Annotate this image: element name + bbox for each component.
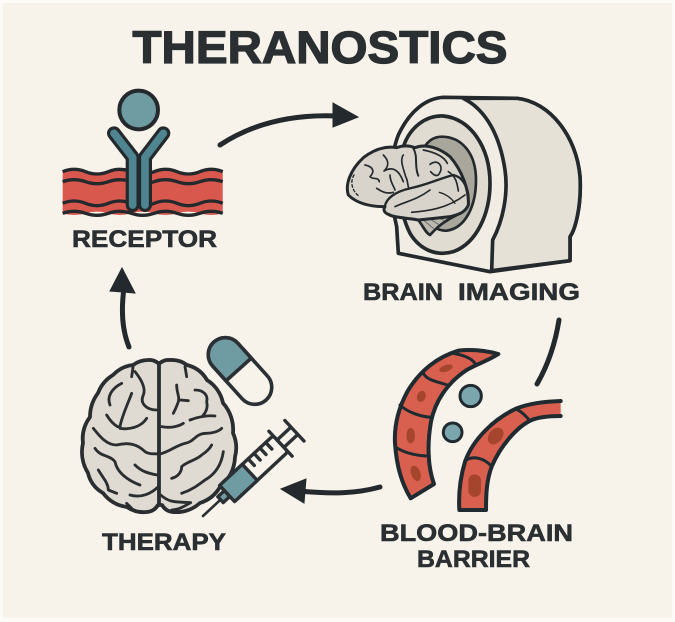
label: receptor: RECEPTOR	[72, 226, 217, 253]
arrow: therapy to receptor	[110, 268, 135, 347]
arrow: imaging to barrier	[537, 320, 559, 384]
arrow: receptor to imaging	[220, 103, 358, 145]
title: THERANOSTICS	[132, 22, 508, 73]
molecules	[460, 385, 481, 407]
label: blood-brain barrier: BARRIER	[417, 546, 530, 573]
label: therapy: THERAPY	[102, 529, 226, 556]
label: brain imaging	[363, 279, 580, 306]
icon: pill	[201, 331, 279, 411]
label: blood-brain barrier	[380, 520, 573, 573]
label: brain imaging: IMAGING	[458, 279, 580, 306]
label: blood-brain barrier: BLOOD-BRAIN	[380, 520, 573, 547]
icon: syringe	[191, 418, 306, 528]
right vessel	[459, 401, 561, 510]
icon: side-view brain	[347, 146, 468, 235]
icon: MRI scanner	[391, 97, 580, 272]
left vessel	[395, 350, 498, 498]
icon: receptor	[63, 91, 223, 215]
icon: therapy brain	[82, 360, 236, 512]
label: brain imaging: BRAIN	[363, 279, 443, 306]
icon: blood-brain barrier	[395, 350, 561, 510]
arrow: barrier to therapy	[281, 479, 380, 503]
